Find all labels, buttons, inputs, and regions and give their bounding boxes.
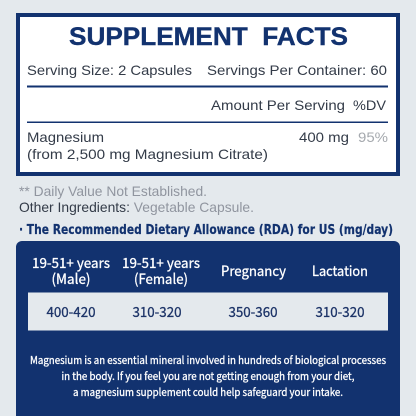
percent daily value: %DV xyxy=(353,97,387,113)
description paragraph xyxy=(30,353,386,400)
value: female: 310-320 xyxy=(132,302,182,322)
magnesium amount: 400 mg xyxy=(299,129,349,145)
title: SUPPLEMENT FACTS xyxy=(69,23,348,51)
value: pregnancy: 350-360 xyxy=(228,302,278,322)
column header: male: 19-51+ years xyxy=(32,253,110,273)
magnesium daily value: 95% xyxy=(358,129,388,145)
amount per serving: Amount Per Serving xyxy=(211,97,345,113)
column header: male xyxy=(32,253,110,289)
daily value note: ** Daily Value Not Established. xyxy=(19,183,207,199)
column header: pregnancy: Pregnancy xyxy=(221,261,287,281)
description paragraph: in the body. If you feel you are not getting enough from your diet, xyxy=(62,369,355,384)
values row xyxy=(28,292,388,330)
panel: RDA table xyxy=(16,241,400,416)
column header: female xyxy=(122,253,200,289)
column header: female: 19-51+ years xyxy=(122,253,200,273)
magnesium source: (from 2,500 mg Magnesium Citrate) xyxy=(27,146,268,162)
column header: female: (Female) xyxy=(134,269,188,289)
column header: lactation: Lactation xyxy=(312,261,368,281)
description paragraph: Magnesium is an essential mineral involved in hundreds of biological processes xyxy=(30,353,386,368)
serving size: Serving Size: 2 Capsules xyxy=(27,62,192,78)
servings per container: Servings Per Container: 60 xyxy=(207,62,387,78)
panel: supplement facts xyxy=(18,15,398,174)
value: lactation: 310-320 xyxy=(316,302,365,322)
value: male: 400-420 xyxy=(46,302,96,322)
other ingredients: Other Ingredients: Vegetable Capsule. xyxy=(19,199,254,215)
column header: male: (Male) xyxy=(52,269,90,289)
magnesium: Magnesium xyxy=(27,129,104,145)
description paragraph: a magnesium supplement could help safeguard your intake. xyxy=(73,385,343,400)
